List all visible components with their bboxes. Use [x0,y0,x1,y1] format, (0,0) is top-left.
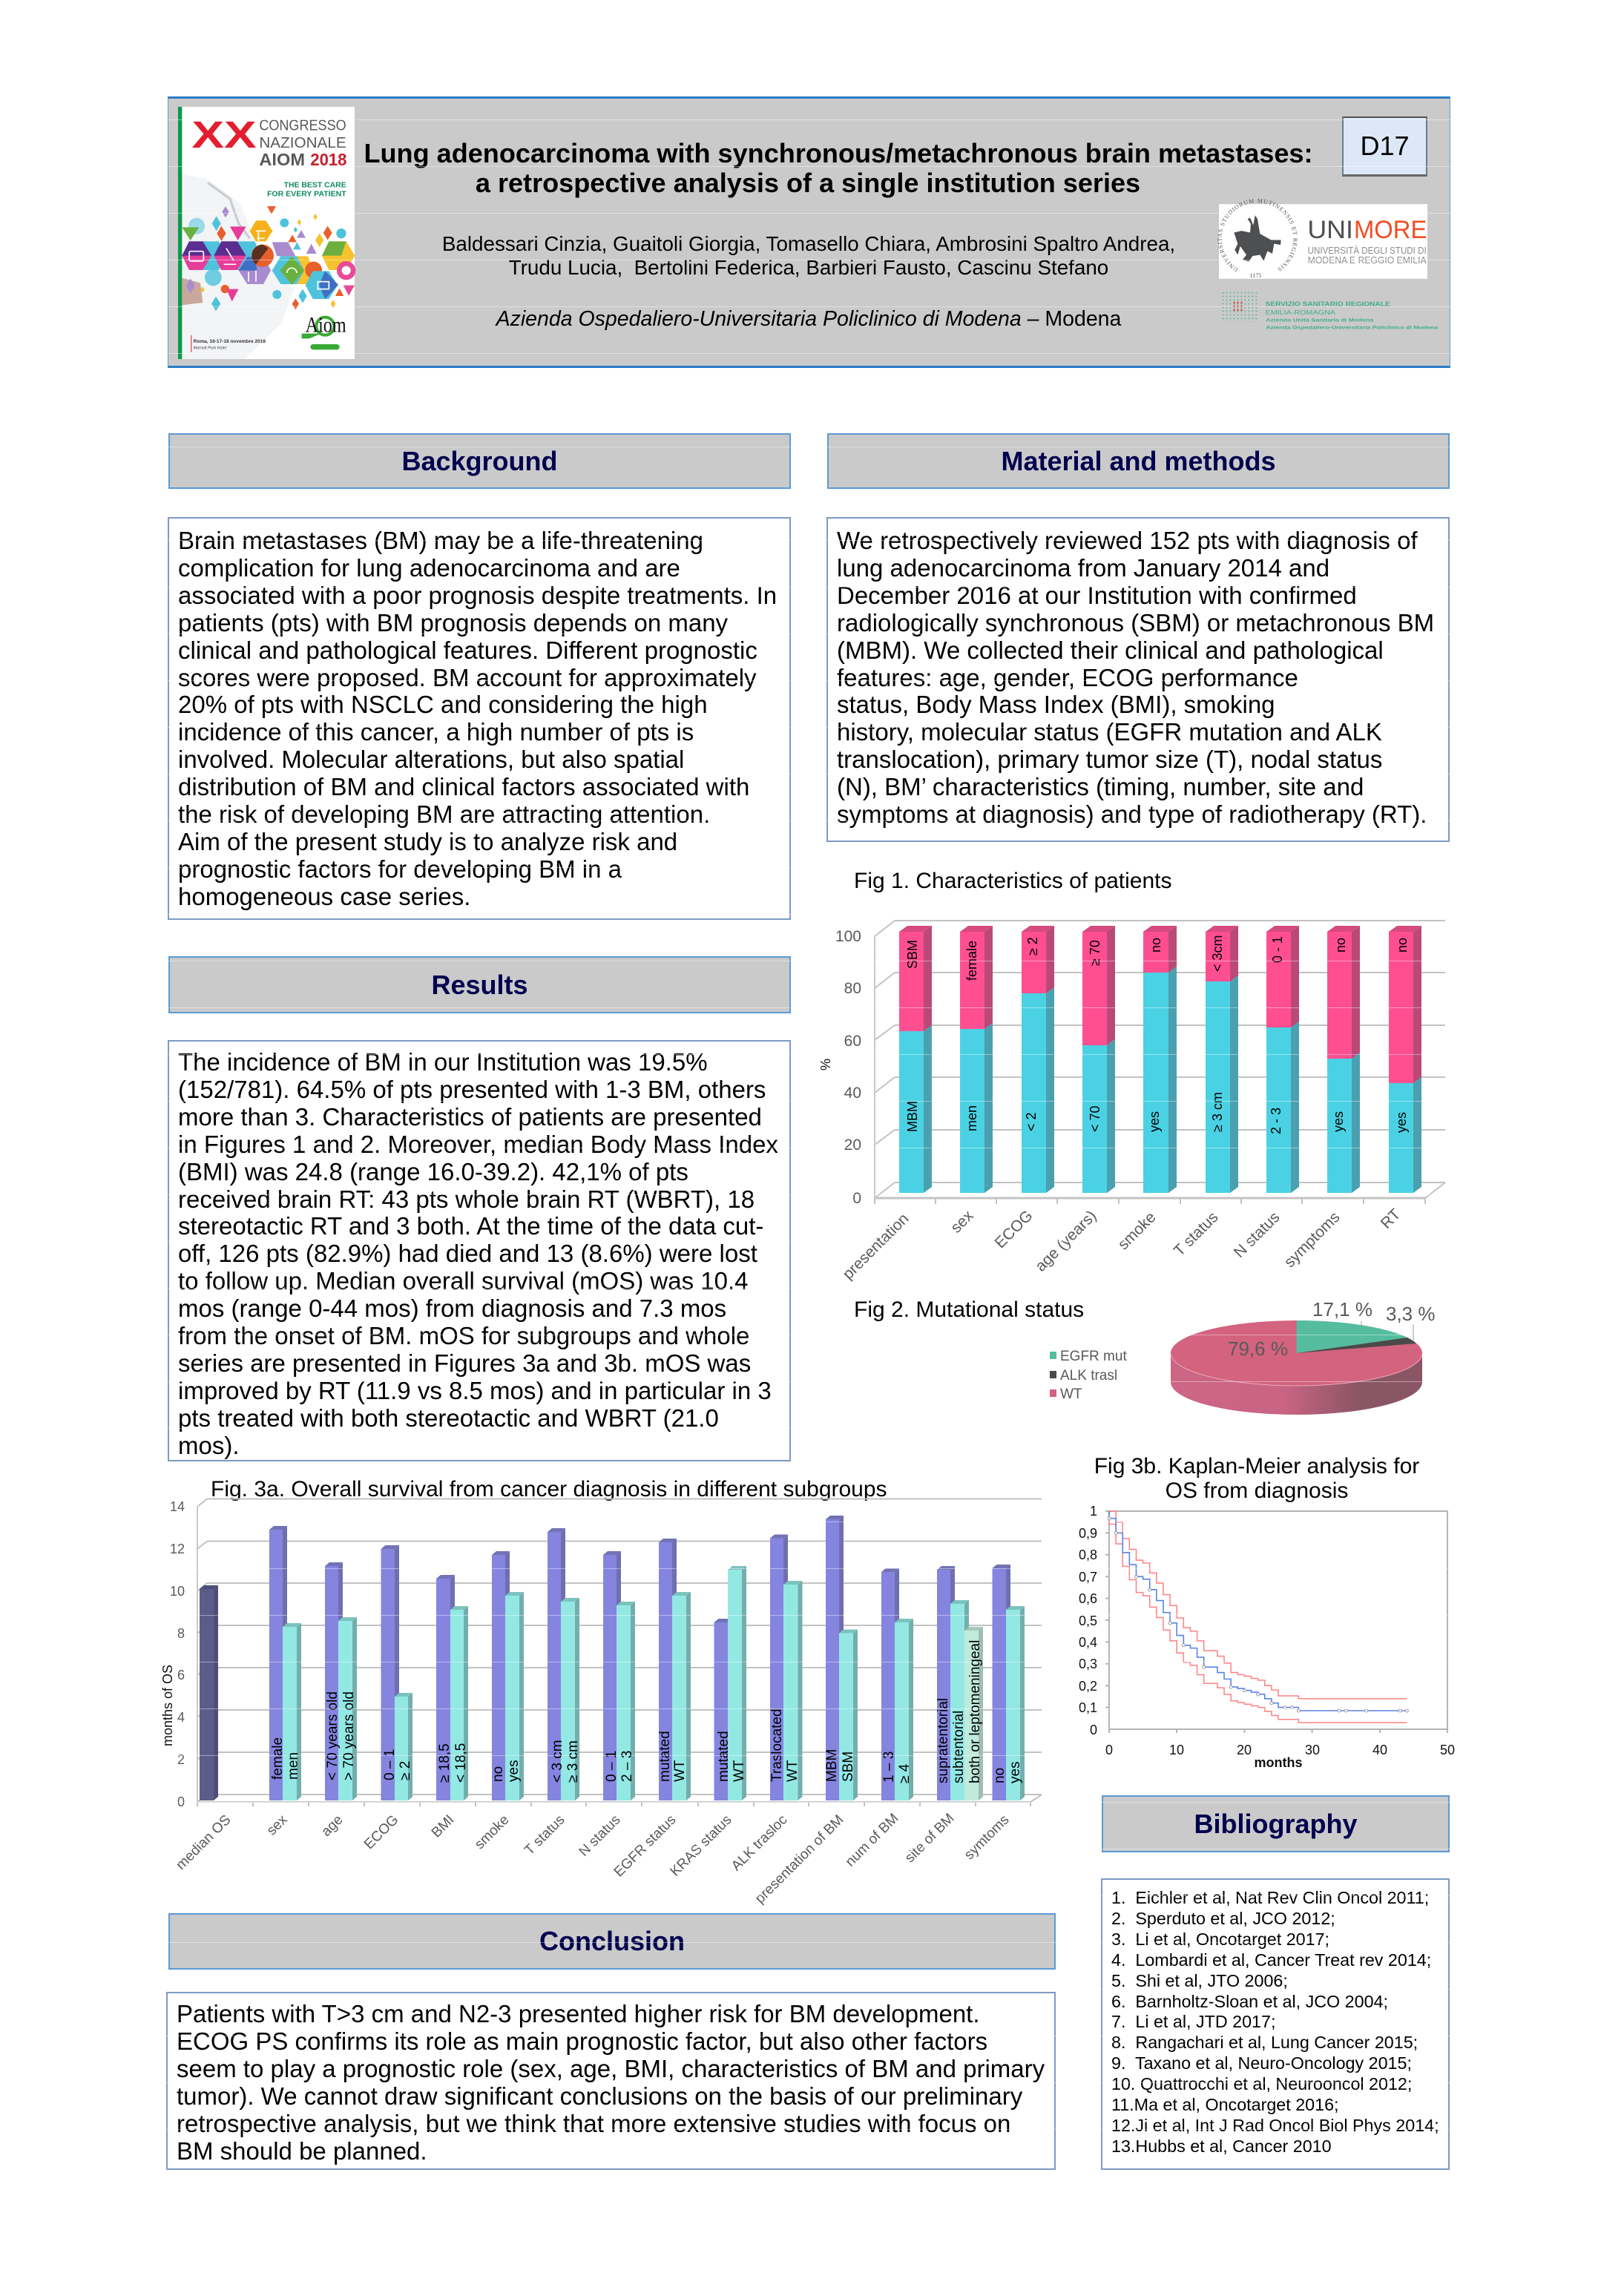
figure title: Fig 3b: OS from diagnosis [1166,1478,1348,1503]
x axis labels: 0 [1105,1743,1113,1757]
text: Material and methods: translocation), primary tumor size (T), nodal status [837,746,1382,773]
pie chart: Fig 2 [1050,1298,1435,1415]
text: Results: (BMI) was 24.8 (range 16.0-39.2). 42,1% of pts [178,1158,688,1185]
logo: UNIMORE: UNI [1307,216,1353,244]
heading: Bibliography [1102,1795,1450,1852]
text: Background: distribution of BM and clinical factors associated with [178,773,749,800]
gridlines [875,921,1445,1198]
bar labels: subtentorial [951,1711,967,1783]
text: Background: complication for lung adenocarcinoma and are [178,554,680,582]
heading: Material and methods [827,433,1450,489]
pie chart: Fig 2: WT [1060,1387,1082,1402]
heading: Background: Background [401,446,558,476]
y axis labels: 0,2 [1079,1679,1097,1694]
scattered shapes [188,218,205,234]
text: Conclusion [166,1992,1056,2170]
bar labels: WT [672,1760,688,1782]
heading: Conclusion: Conclusion [539,1926,685,1956]
ALK trasloc [770,1534,803,1800]
bar labels: men [286,1752,301,1780]
bar labels: < 3cm [1210,935,1225,972]
text: Material and methods: (N), BM’ characteristics (timing, number, site and [837,773,1364,800]
bar labels: yes [1394,1112,1409,1133]
bar labels: 0 – 1 [382,1749,398,1780]
text: Background: incidence of this cancer, a high number of pts is [178,718,694,746]
congress title: XX [191,114,257,156]
heading: Material and methods: Material and methods [1001,446,1276,476]
y axis labels: 0 [1090,1723,1097,1737]
bar labels: WT [785,1760,801,1782]
text: Background: scores were proposed. BM account for approximately [178,664,757,691]
y axis labels: 20 [844,1137,861,1154]
bar labels: < 70 years old [325,1691,341,1780]
bar labels: > 70 years old [341,1691,357,1780]
logo: UNIMORE: MODENA E REGGIO EMILIA [1308,254,1427,266]
congress poster image [178,107,356,359]
y axis labels: 2 [177,1752,185,1767]
x axis labels: 40 [1372,1743,1387,1757]
authors [442,232,1175,279]
bar labels [905,935,1410,1134]
text: Material and methods: lung adenocarcinoma from January 2014 and [837,554,1329,582]
x axis labels: ECOG [361,1812,402,1852]
text: Background: homogeneous case series. [178,883,470,910]
text: Conclusion: retrospective analysis, but we think that more extensive studies with focus on [177,2110,1010,2137]
bar labels: yes [1147,1111,1162,1132]
bar chart: Fig 3a [160,1499,1042,1907]
age [325,1562,357,1800]
text: Results: series are presented in Figures 3a and 3b. mOS was [178,1349,751,1377]
site of BM [937,1566,983,1800]
x axis labels: num of BM [843,1811,902,1870]
y axis labels: 0,5 [1079,1614,1097,1628]
bar labels: < 3 cm [550,1740,565,1783]
text: Results: The incidence of BM in our Institution was 19.5% [178,1048,708,1076]
x axis labels: EGFR status [611,1812,680,1880]
bar labels: < 2 [1024,1112,1039,1131]
x axis labels: N status [576,1812,624,1860]
text: Background: patients (pts) with BM prognosis depends on many [178,609,728,637]
x axis labels: presentation [840,1210,913,1283]
hexagon mosaic [182,241,213,270]
title: a retrospective analysis of a single institution series [476,168,1140,198]
text: Material and methods: history, molecular status (EGFR mutation and ALK [837,718,1382,746]
congress poster image: FOR EVERY PATIENT [267,191,346,199]
logo: regional health service: EMILIA-ROMAGNA [1266,309,1335,316]
y axis labels: 0 [177,1795,185,1809]
text: Bibliography: 4. Lombardi et al, Cancer Treat rev 2014; [1111,1950,1431,1970]
text: Background: 20% of pts with NSCLC and considering the high [178,691,708,718]
logo: UNIMORE: MORE [1354,216,1427,244]
y axis labels [170,1499,185,1809]
text: Material and methods: (MBM). We collected their clinical and pathological [837,637,1384,664]
bar labels: both or leptomeningeal [967,1640,983,1783]
x axis labels [173,1811,1013,1907]
KRAS status [714,1566,746,1800]
text: Background: the risk of developing BM are attracting attention. [178,800,710,828]
ECOG [381,1545,412,1800]
text: Results: (152/781). 64.5% of pts presented with 1-3 BM, others [178,1076,766,1103]
bar labels: 1 – 3 [881,1751,897,1783]
sex [269,1526,301,1800]
logo: regional health service: Azienda Ospedaliero-Universitaria Policlinico di Modena [1266,325,1439,330]
green stripe [178,107,182,359]
text: Bibliography: 2. Sperduto et al, JCO 2012; [1111,1909,1335,1928]
x axis labels: median OS [173,1812,234,1873]
poster code badge [1342,116,1427,177]
y axis labels: 80 [844,980,861,997]
logo: UNIMORE: UNIVERSITAS STUDIORUM MUTINENSIS ET REGIENSIS [1217,199,1298,272]
text: Background [168,517,791,920]
x axis labels: KRAS status [668,1812,735,1880]
bar labels: 2 – 3 [619,1751,635,1782]
bar labels: ≥ 4 [897,1763,913,1783]
x axis labels: smoke [472,1812,513,1852]
y axis labels: 0 [852,1190,861,1207]
text: Conclusion: BM should be planned. [177,2137,427,2165]
x axis labels: symptoms [1281,1208,1344,1271]
congress poster image: CONGRESSO [259,117,346,134]
congress poster image: Aiom [306,313,346,337]
stacked bar chart: Fig 1 [818,920,1445,1283]
bar labels: < 18,5 [453,1743,469,1783]
x axis labels: presentation of BM [752,1812,847,1907]
bar labels: mutated [657,1731,673,1782]
smoke [492,1551,524,1800]
figure title: Fig 2: Fig 2. Mutational status [854,1297,1084,1322]
figure title: Fig 3a: Fig. 3a. Overall survival from cancer diagnosis in different subgroups [211,1477,887,1501]
x axis labels: sex [264,1812,291,1838]
y axis labels: 6 [177,1668,185,1682]
logo: regional health service: Azienda Unità Sanitaria di Modena [1266,318,1374,323]
bar labels: Traslocated [769,1708,785,1782]
title: Lung adenocarcinoma with synchronous/metachronous brain metastases: [364,138,1313,168]
text: Results: improved by RT (11.9 vs 8.5 mos) and in particular in 3 [178,1377,772,1404]
bar labels: MBM [905,1101,920,1132]
bar labels: SBM [905,940,920,969]
bar labels: < 70 [1088,1105,1102,1132]
congress poster image: Marriott Park Hotel [194,346,227,351]
figure title: Fig 3b: Fig 3b. Kaplan-Meier analysis for [1094,1454,1419,1478]
title [364,138,1313,198]
text: Background: associated with a poor prognosis despite treatments. In [178,582,777,609]
bar labels: yes [506,1760,522,1782]
text: Material and methods: December 2016 at our Institution with confirmed [837,582,1357,609]
y axis labels: 60 [844,1033,861,1050]
x axis labels: 30 [1305,1743,1320,1757]
text: Results: pts treated with both stereotactic and WBRT (21.0 [178,1404,719,1432]
x axis labels [1105,1743,1455,1757]
text: Material and methods: symptoms at diagnosis) and type of radiotherapy (RT). [837,800,1427,828]
congress poster image: Roma, 16-17-18 novembre 2018 [194,339,266,344]
text: Results [168,1040,791,1461]
text: Bibliography: 7. Li et al, JTD 2017; [1111,2012,1275,2031]
text: Bibliography: 10. Quattrocchi et al, Neurooncol 2012; [1111,2074,1412,2093]
text: Background: involved. Molecular alterations, but also spatial [178,746,684,773]
x axis labels: RT [1378,1205,1404,1232]
bar labels: ≥ 2 [1025,937,1040,955]
logo: regional health service: SERVIZIO SANITARIO REGIONALE [1266,300,1390,308]
authors: Baldessari Cinzia, Guaitoli Giorgia, Tomasello Chiara, Ambrosini Spaltro Andrea, [442,232,1175,255]
poster code badge: D17 [1360,131,1410,161]
text: Bibliography: 6. Barnholtz-Sloan et al, JCO 2004; [1111,1992,1388,2011]
bar labels: yes [1007,1761,1023,1783]
text: Material and methods: We retrospectively reviewed 152 pts with diagnosis of [837,527,1418,554]
bar labels: no [992,1768,1007,1783]
bar labels: ≥ 3 cm [1210,1092,1225,1132]
white pictograms [189,223,329,289]
x axis labels: sex [947,1207,977,1237]
confidence bands and survival curve [1109,1511,1407,1723]
x axis labels: T status [522,1812,568,1858]
x axis labels: 20 [1237,1743,1252,1757]
text: Bibliography: 1. Eichler et al, Nat Rev Clin Oncol 2011; [1111,1888,1429,1907]
congress poster image: 2018 [310,150,346,169]
text: Bibliography: 8. Rangachari et al, Lung Cancer 2015; [1111,2033,1418,2052]
logo: UNIMORE: 1175 [1250,272,1261,279]
text: Background: prognostic factors for developing BM in a [178,855,622,883]
y axis labels: 10 [170,1584,185,1599]
institution: Azienda Ospedaliero-Universitaria Policlinico di Modena – Modena [496,307,1121,331]
y axis labels [835,928,861,1207]
y axis labels [1079,1504,1097,1737]
y axis labels: 0,1 [1079,1700,1097,1715]
bar labels: supratentorial [936,1698,951,1783]
x axis labels: BMI [429,1812,458,1841]
header panel [168,96,1450,368]
heading: Background [168,433,791,489]
text: Results: received brain RT: 43 pts whole brain RT (WBRT), 18 [178,1185,755,1213]
bar labels: 0 – 1 [604,1751,619,1782]
text: Results: more than 3. Characteristics of patients are presented [178,1103,762,1131]
censoring marks [1108,1517,1408,1712]
text: Bibliography [1101,1878,1450,2170]
pie chart: Fig 2: 3,3 % [1386,1303,1435,1325]
y axis labels: 8 [177,1626,185,1641]
y axis labels: 4 [177,1710,185,1725]
y axis labels: 0,9 [1079,1526,1097,1541]
text: Bibliography: 12.Ji et al, Int J Rad Oncol Biol Phys 2014; [1111,2116,1439,2135]
heading: Results: Results [431,970,528,1000]
figure title: Fig 3b [1094,1454,1419,1503]
doctor coat [182,174,295,359]
text: Background: clinical and pathological features. Different prognostic [178,637,757,664]
figure title: Fig 1: Fig 1. Characteristics of patients [854,869,1172,893]
symptoms [993,1565,1025,1800]
y axis labels: 100 [835,928,861,945]
x axis labels: 10 [1169,1743,1184,1757]
y axis labels: 0,7 [1079,1570,1097,1585]
x axis labels: site of BM [902,1811,958,1866]
pie labels: 17,1 % [1312,1298,1372,1320]
text: Material and methods [826,517,1450,842]
bar labels: 2 - 3 [1269,1108,1283,1134]
text: Results: stereotactic RT and 3 both. At the time of the data cut- [178,1212,763,1240]
y axis labels: 1 [1090,1504,1097,1519]
heading: Conclusion [168,1913,1056,1970]
bar labels: 0 - 1 [1270,936,1285,963]
pie chart: Fig 2: 79,6 % [1228,1338,1288,1360]
bar labels: ≥ 18,5 [437,1743,453,1783]
heading: Results [168,956,791,1013]
text: Background: Brain metastases (BM) may be a life-threatening [178,527,703,554]
bar labels: female [964,941,979,981]
bar labels: no [1395,938,1410,953]
bar labels [270,1640,1023,1783]
N status [603,1551,635,1800]
x axis labels: age [318,1812,346,1840]
text: Conclusion: tumor). We cannot draw significant conclusions on the basis of our preliminary [177,2082,1022,2110]
legend [1050,1352,1056,1359]
x axis labels: smoke [1115,1208,1160,1253]
text: Results: in Figures 1 and 2. Moreover, median Body Mass Index [178,1131,778,1158]
x axis labels [840,1205,1404,1283]
bar labels: MBM [824,1749,840,1782]
text: Conclusion: Patients with T>3 cm and N2-3 presented higher risk for BM development. [177,2000,980,2027]
presentation of BM [826,1516,858,1800]
bar labels: ≥ 70 [1088,940,1102,966]
pie chart: Fig 2: EGFR mut [1060,1349,1127,1364]
bar labels: mutated [716,1731,732,1782]
text: Results: mos (range 0-44 mos) from diagnosis and 7.3 mos [178,1295,726,1322]
AIOM logo [316,318,334,335]
text: Bibliography: 11.Ma et al, Oncotarget 2016; [1111,2095,1338,2114]
logo: UNIMORE [1217,199,1427,279]
pie chart: Fig 2: ALK trasl [1060,1368,1117,1384]
text: Bibliography: 9. Taxano et al, Neuro-Oncology 2015; [1111,2053,1412,2073]
text: Conclusion: seem to play a prognostic role (sex, age, BMI, characteristics of BM and primary [177,2055,1045,2082]
logo: UNIMORE: UNIVERSITÀ DEGLI STUDI DI [1308,245,1427,256]
x axis labels: T status [1171,1208,1222,1260]
bar labels: WT [732,1760,747,1782]
bar labels: yes [1331,1111,1346,1132]
authors: Trudu Lucia, Bertolini Federica, Barbieri Fausto, Cascinu Stefano [509,256,1108,279]
text: Conclusion: ECOG PS confirms its role as main prognostic factor, but also other factors [177,2027,987,2055]
stacked bar chart: Fig 1: % [818,1059,833,1070]
text: Material and methods: radiologically synchronous (SBM) or metachronous BM [837,609,1434,637]
bar labels: men [964,1105,979,1131]
bar labels: no [1333,938,1348,953]
text: Material and methods: features: age, gender, ECOG performance [837,664,1298,691]
text: Results: from the onset of BM. mOS for subgroups and whole [178,1322,749,1349]
x axis labels: ALK trasloc [729,1812,791,1874]
y axis labels: 0,6 [1079,1591,1097,1606]
congress poster image: THE BEST CARE [284,182,346,190]
text: Bibliography: 5. Shi et al, JTO 2006; [1111,1971,1288,1990]
EGFR status [659,1539,691,1800]
x axis labels: symtoms [961,1812,1013,1863]
text: Background: Aim of the present study is to analyze risk and [178,828,677,855]
y axis labels: 0,3 [1079,1657,1097,1671]
bar labels: ≥ 2 [398,1761,413,1780]
y axis labels: 14 [170,1499,185,1514]
bar labels: female [270,1737,286,1780]
x axis labels: 50 [1440,1743,1455,1757]
bar labels: no [1148,938,1163,953]
text: Material and methods: status, Body Mass Index (BMI), smoking [837,691,1275,718]
y axis labels: 0,8 [1079,1547,1097,1562]
logo: regional health service [1223,292,1439,330]
Kaplan-Meier chart: Fig 3b: months [1254,1755,1303,1770]
text: Results: off, 126 pts (82.9%) had died and 13 (8.6%) were lost [178,1240,757,1267]
congress poster image: NAZIONALE [259,135,346,151]
text: Results: to follow up. Median overall survival (mOS) was 10.4 [178,1267,748,1295]
bar labels: SBM [841,1751,856,1782]
bar labels: ≥ 3 cm [565,1740,581,1783]
text: Results: mos). [178,1432,239,1459]
x axis labels: age (years) [1032,1207,1100,1275]
heading: Bibliography: Bibliography [1194,1809,1358,1839]
text: Bibliography: 3. Li et al, Oncotarget 2017; [1111,1930,1329,1949]
y axis labels: 40 [844,1085,861,1102]
bar labels: no [490,1766,506,1782]
median OS [200,1585,218,1800]
num of BM [881,1568,913,1800]
y axis labels: 12 [170,1542,185,1556]
bar chart: Fig 3a: months of OS [160,1665,175,1746]
text: Bibliography: 13.Hubbs et al, Cancer 2010 [1111,2137,1332,2156]
bars [899,1031,924,1193]
x axis labels: ECOG [992,1207,1036,1251]
x axis labels: N status [1231,1208,1283,1261]
BMI [436,1575,468,1800]
T status [548,1528,579,1800]
Kaplan-Meier chart: Fig 3b [1079,1504,1455,1770]
congress poster image: AIOM [259,150,305,169]
y axis labels: 0,4 [1079,1635,1097,1650]
